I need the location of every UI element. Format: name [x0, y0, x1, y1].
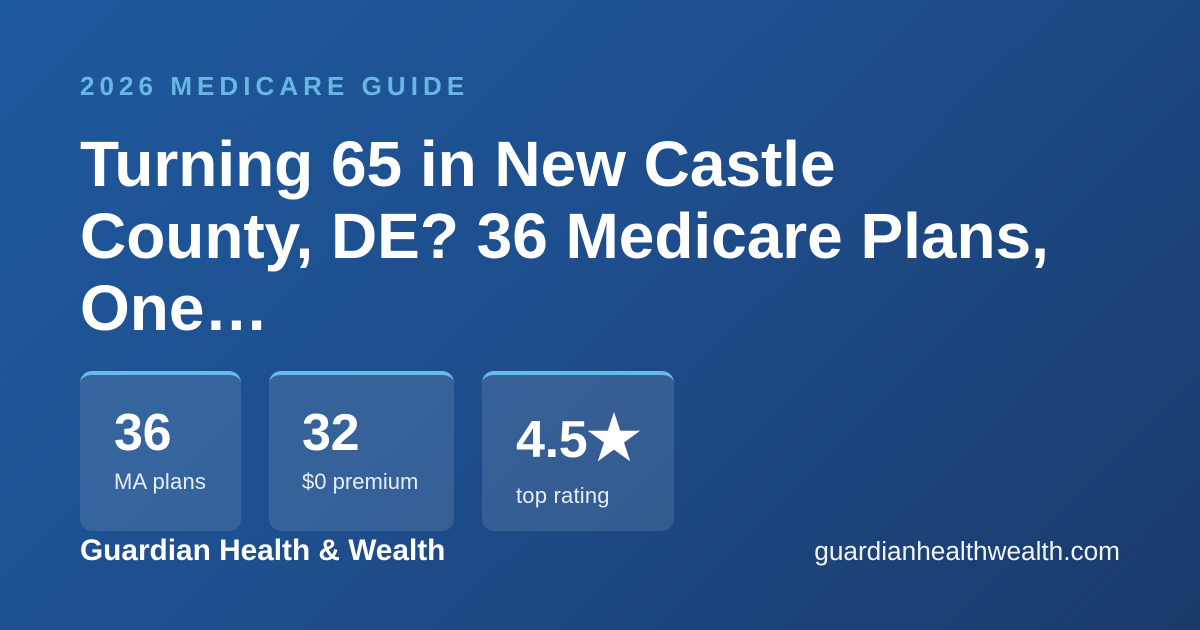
stat value: 36: [114, 404, 171, 462]
stat value: 32: [302, 404, 359, 462]
stat card: MA plans: [80, 371, 241, 531]
website: guardianhealthwealth.com: [814, 536, 1120, 566]
stat card: top rating: [482, 371, 674, 531]
stat label: MA plans: [114, 469, 206, 494]
stat value: [516, 399, 644, 478]
title: One…: [80, 272, 268, 344]
stat card: $0 premium: [269, 371, 454, 531]
stat value: 4.5: [516, 411, 587, 469]
title: County, DE? 36 Medicare Plans,: [80, 200, 1049, 272]
eyebrow label: 2026 MEDICARE GUIDE: [80, 71, 469, 101]
stat value: ★: [584, 399, 644, 478]
brand name: Guardian Health & Wealth: [80, 534, 445, 567]
stat label: $0 premium: [302, 469, 418, 494]
title: [80, 128, 1049, 344]
title: Turning 65 in New Castle: [80, 128, 836, 200]
stat label: top rating: [516, 483, 610, 508]
